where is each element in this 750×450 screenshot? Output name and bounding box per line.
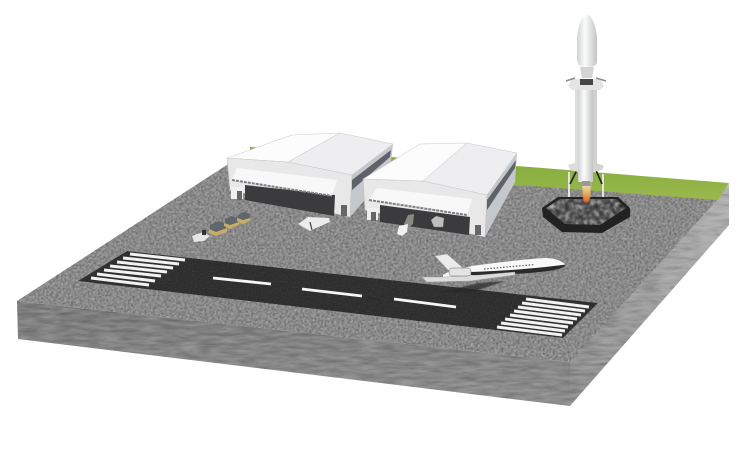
threshold stripes: right <box>497 299 589 335</box>
tail fin <box>435 254 463 272</box>
dark avionics band <box>580 79 593 85</box>
leg struts <box>570 168 602 184</box>
fuselage <box>443 258 566 277</box>
plane shadow <box>440 281 505 293</box>
wing <box>422 272 515 282</box>
slab: right soil side <box>570 184 729 406</box>
landing pad <box>542 197 630 233</box>
airplane <box>422 254 566 293</box>
door canopy <box>369 188 472 215</box>
service vehicle <box>298 217 330 231</box>
door canopy <box>232 168 337 196</box>
tug <box>192 230 210 242</box>
upper ring <box>568 79 604 90</box>
grass strip behind the site <box>250 147 729 201</box>
hangar 2 <box>363 143 517 237</box>
hangar 1 <box>227 133 393 217</box>
engine bell <box>581 181 591 186</box>
payload fairing <box>577 15 597 67</box>
front wall <box>363 179 487 237</box>
side windows band <box>487 160 516 210</box>
grid fins <box>566 78 606 81</box>
engine <box>449 268 471 276</box>
roof: left slope <box>227 133 340 162</box>
cargo dolly 2 <box>224 216 239 229</box>
runway <box>78 251 598 338</box>
side windows band <box>352 150 391 190</box>
parked equipment <box>431 216 444 227</box>
side wall <box>350 144 393 217</box>
side rails <box>575 90 578 164</box>
roof: right slope <box>423 143 517 195</box>
slab: front soil side <box>17 301 570 406</box>
pad base <box>542 197 630 233</box>
door truss <box>232 180 332 196</box>
side wall <box>485 153 517 237</box>
lower fins <box>568 162 578 172</box>
fuselage dark underside <box>471 264 566 275</box>
door posts <box>367 208 378 220</box>
core stage <box>578 88 593 182</box>
roof: right slope <box>288 133 393 175</box>
centerline dashes <box>213 278 456 307</box>
cargo dolly 3 <box>237 212 250 224</box>
threshold stripes: left <box>91 254 185 285</box>
window line <box>484 264 535 269</box>
hangar opening <box>380 205 470 235</box>
door truss <box>369 200 467 215</box>
rocket <box>566 15 606 202</box>
landing legs <box>569 172 603 197</box>
roof: left slope <box>363 143 467 181</box>
parked truck <box>397 214 414 236</box>
door posts <box>231 187 243 199</box>
gravel ground surface <box>17 148 717 362</box>
cargo dolly 1 <box>209 221 227 236</box>
front wall <box>227 158 352 217</box>
ground vehicles <box>192 212 330 242</box>
pad rubble <box>546 199 626 225</box>
exhaust flame <box>582 183 591 202</box>
hangar opening <box>245 185 335 216</box>
neck <box>580 67 594 78</box>
runway asphalt <box>78 251 598 338</box>
